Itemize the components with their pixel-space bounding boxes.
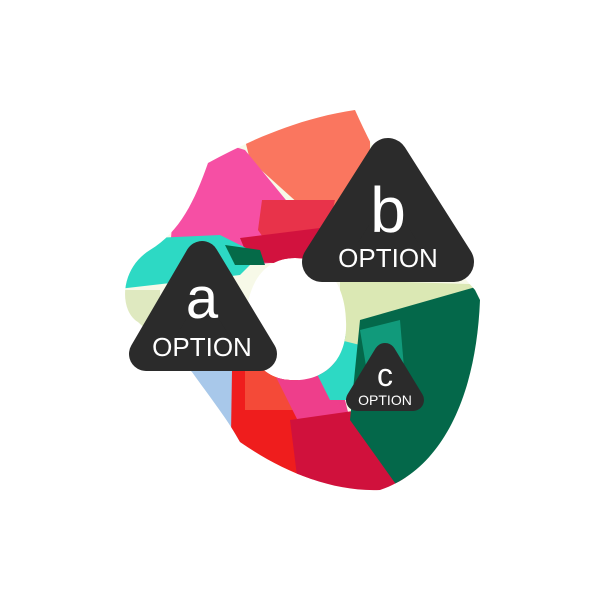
segment: teal-green mid right <box>360 320 404 364</box>
segment: crimson bottom <box>290 411 406 490</box>
option b triangle: b <box>370 174 406 246</box>
segment: teal right <box>318 334 358 400</box>
segment: pink <box>171 148 300 264</box>
option c triangle: c <box>377 357 393 393</box>
segment: light green right <box>340 282 478 344</box>
option b triangle: OPTION <box>338 243 438 273</box>
segment: teal left <box>125 235 250 288</box>
option b triangle <box>322 158 454 273</box>
option a triangle: a <box>186 266 219 331</box>
segment: light green left <box>125 290 160 326</box>
segment: red under b <box>258 200 335 265</box>
option a triangle: OPTION <box>152 332 252 362</box>
option c triangle: OPTION <box>358 392 412 408</box>
segment: orange-red bottom <box>245 370 292 410</box>
segment: crimson under b <box>240 228 320 265</box>
segment: orange top <box>246 110 370 207</box>
segment: pink bottom <box>276 362 348 419</box>
segment: light blue lower left <box>191 371 245 446</box>
option a triangle <box>146 258 260 362</box>
segment: dark green right <box>350 288 480 484</box>
segment: red bottom <box>231 370 312 480</box>
segment: dark green left <box>225 245 265 265</box>
option c triangle <box>357 354 413 408</box>
ring shape <box>125 110 480 490</box>
